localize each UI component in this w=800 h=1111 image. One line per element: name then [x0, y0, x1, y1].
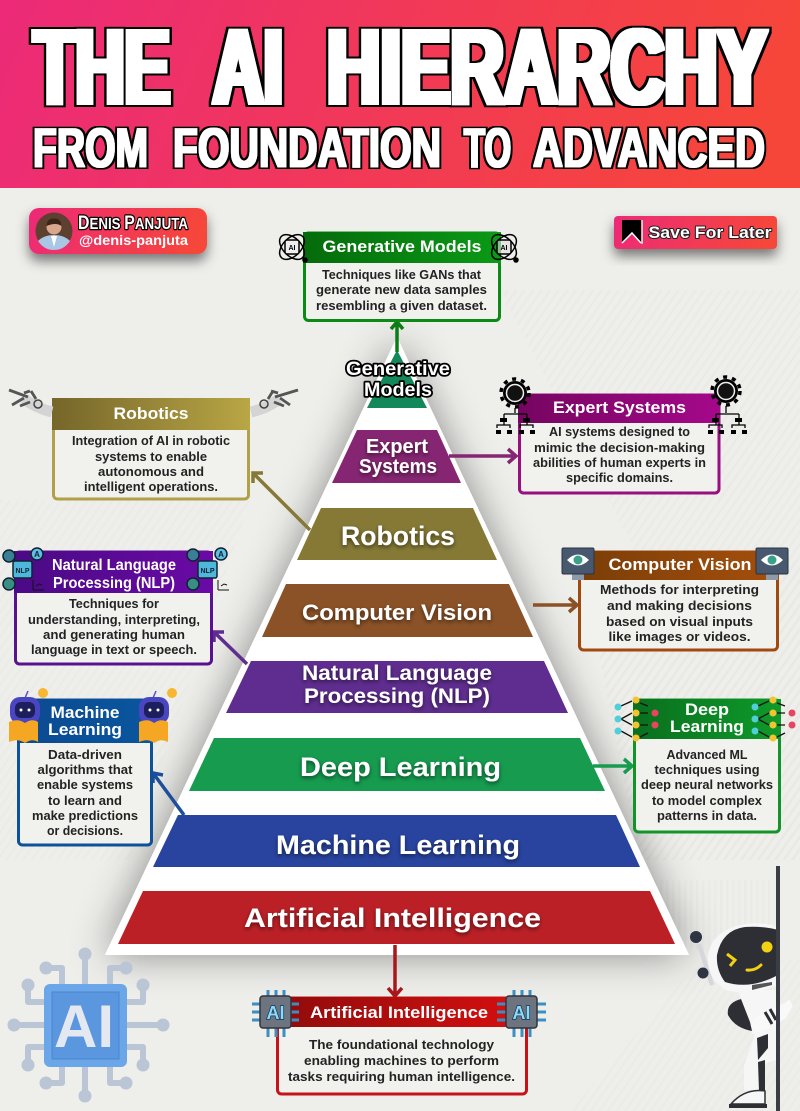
- icon: robot hand left: [9, 390, 52, 412]
- description: and making decisions: [607, 598, 752, 613]
- tier: expert systems: Systems: [359, 456, 437, 478]
- header banner: [0, 0, 800, 188]
- heading: Expert Systems: [553, 398, 686, 417]
- panel: natural language processing: [3, 548, 229, 664]
- description: make predictions: [32, 808, 138, 823]
- heading: Learning: [48, 720, 122, 739]
- icon: neural network left: [614, 696, 658, 742]
- description: to model complex: [652, 793, 763, 808]
- description: [533, 424, 706, 485]
- heading: Robotics: [114, 404, 188, 423]
- avatar portrait: [36, 212, 72, 250]
- arrow: expert: [449, 449, 516, 463]
- author name: DENIS PANJUTA: [78, 213, 188, 234]
- description: [641, 747, 773, 823]
- description: [72, 433, 230, 494]
- description: systems to enable: [95, 449, 207, 464]
- pyramid: [105, 337, 689, 955]
- description: mimic the decision-making: [534, 440, 705, 455]
- icon: atom chip right: AI: [500, 245, 508, 252]
- icon: neural network right: [752, 696, 796, 742]
- heading: [578, 551, 779, 580]
- heading: Processing (NLP): [53, 575, 175, 592]
- tier: natural language processing: Natural Language: [302, 662, 492, 685]
- description: based on visual inputs: [606, 614, 753, 629]
- description: abilities of human experts in: [533, 455, 706, 470]
- subtitle: FOUNDATION: [173, 116, 441, 179]
- arrow: machine learning: [153, 773, 184, 815]
- panel: artificial intelligence: [252, 990, 546, 1094]
- heading: Computer Vision: [608, 555, 752, 574]
- arrow: deep learning: [593, 759, 632, 773]
- icon: atom chip left: AI: [288, 245, 296, 252]
- panel: expert systems: [496, 377, 747, 493]
- icon: nlp chip right: A: [218, 550, 224, 559]
- icon: large ai chip: [8, 948, 170, 1102]
- tier: expert systems: [332, 430, 461, 483]
- heading: Natural Language: [52, 557, 176, 574]
- author handle: @denis-panjuta: [79, 233, 189, 248]
- arrow: artificial intelligence: [388, 945, 402, 996]
- icon: reading robot right: [139, 688, 177, 743]
- icon: ai chip right: AI: [512, 1003, 530, 1023]
- description: autonomous and: [98, 464, 204, 479]
- tier: natural language processing: [226, 661, 568, 713]
- description: The foundational technology: [309, 1037, 495, 1052]
- icon: atom chip right: [487, 230, 521, 264]
- tier: generative models: Generative: [346, 359, 450, 380]
- arrow: generative: [391, 322, 403, 352]
- heading: Artificial Intelligence: [310, 1003, 488, 1022]
- illustration: robot on pole: [690, 866, 793, 1111]
- description: [316, 267, 487, 313]
- tier: computer vision: [262, 584, 533, 637]
- icon: monitor eye right: [756, 548, 788, 580]
- heading: [17, 699, 153, 743]
- heading: Generative Models: [322, 237, 482, 256]
- description: like images or videos.: [608, 629, 750, 644]
- icon: nlp chip right: NLP: [200, 568, 215, 575]
- description: understanding, interpreting,: [28, 612, 200, 627]
- description: [28, 596, 200, 657]
- icon: bookmark: [622, 220, 643, 244]
- arrow: nlp: [214, 632, 247, 664]
- tier: natural language processing: Processing (NLP): [304, 685, 490, 708]
- description: enabling machines to perform: [304, 1053, 499, 1068]
- icon: ai chip left: [252, 990, 299, 1037]
- tier: robotics: Robotics: [341, 521, 455, 551]
- tier: deep learning: Deep Learning: [300, 752, 501, 782]
- legs: [729, 1034, 776, 1108]
- icon: robot hand right: [251, 390, 298, 412]
- subtitle: FROM: [33, 116, 148, 179]
- title: THE: [34, 6, 170, 127]
- icon: nlp chip left: NLP: [16, 568, 30, 575]
- tier: robotics: [297, 508, 497, 560]
- panel: computer vision: [562, 548, 788, 650]
- heading: Learning: [670, 717, 744, 736]
- subtitle: TO: [464, 116, 511, 179]
- icon: large ai chip: AI: [54, 993, 114, 1060]
- heading: Machine: [50, 703, 120, 722]
- description: intelligent operations.: [84, 479, 218, 494]
- heading: Deep: [685, 700, 729, 719]
- author badge: [29, 208, 207, 254]
- tier: artificial intelligence: Artificial Intelligence: [244, 903, 541, 933]
- icon: gear hierarchy right: [708, 377, 747, 434]
- description: specific domains.: [566, 470, 673, 485]
- icon: ai chip left: AI: [266, 1003, 284, 1023]
- head: [708, 923, 778, 993]
- icon: atom chip left: [275, 230, 309, 264]
- tier: machine learning: [153, 815, 640, 867]
- description: language in text or speech.: [31, 642, 197, 657]
- heading: [518, 394, 720, 423]
- description: Techniques for: [69, 596, 159, 611]
- title: AI: [213, 6, 283, 127]
- heading: [303, 232, 501, 263]
- heading: [52, 398, 250, 430]
- tier: computer vision: Computer Vision: [302, 600, 492, 625]
- tier: artificial intelligence: [118, 891, 675, 944]
- description: enable systems: [37, 777, 133, 792]
- tier: generative models: Models: [364, 380, 432, 401]
- arrow: computer vision: [533, 598, 577, 612]
- body: [728, 982, 793, 1034]
- save for later badge: [614, 216, 777, 249]
- panel: machine learning: [9, 688, 177, 845]
- tier: expert systems: Expert: [366, 436, 428, 458]
- icon: nlp chip right: [187, 548, 229, 590]
- panel: robotics: [9, 390, 298, 499]
- icon: monitor eye left: [562, 548, 594, 580]
- subtitle: [33, 116, 765, 179]
- panel: deep learning: [614, 696, 796, 832]
- description: Methods for interpreting: [600, 582, 759, 597]
- description: to learn and: [48, 793, 122, 808]
- tier: deep learning: [189, 738, 605, 791]
- title: [34, 6, 767, 127]
- pole: [776, 866, 780, 1111]
- heading: [276, 997, 528, 1027]
- icon: gear hierarchy left: [496, 379, 535, 434]
- tier: machine learning: Machine Learning: [276, 830, 520, 860]
- description: Advanced ML: [666, 747, 748, 762]
- icon: nlp chip left: A: [34, 550, 40, 559]
- panel: generative models: [275, 230, 521, 320]
- description: AI systems designed to: [549, 424, 690, 439]
- heading: [633, 699, 781, 739]
- icon: nlp chip left: [3, 548, 44, 590]
- description: tasks requiring human intelligence.: [288, 1069, 515, 1084]
- description: deep neural networks: [641, 777, 773, 792]
- description: [600, 582, 759, 644]
- description: [32, 747, 138, 838]
- description: or decisions.: [47, 823, 123, 838]
- description: generate new data samples: [316, 282, 487, 297]
- description: [288, 1037, 515, 1084]
- icon: reading robot left: [9, 688, 48, 743]
- description: and generating human: [43, 627, 185, 642]
- description: Data-driven: [48, 747, 122, 762]
- description: techniques using: [654, 762, 760, 777]
- antenna: [690, 931, 712, 985]
- description: patterns in data.: [657, 808, 757, 823]
- heading: [14, 551, 213, 593]
- description: Integration of AI in robotic: [72, 433, 230, 448]
- description: resembling a given dataset.: [316, 298, 487, 313]
- tier: generative models: [346, 350, 450, 408]
- icon: ai chip right: [497, 990, 546, 1037]
- save label: Save For Later: [648, 224, 772, 242]
- description: algorithms that: [38, 762, 133, 777]
- arrow: robotics: [253, 473, 310, 530]
- description: Techniques like GANs that: [322, 267, 482, 282]
